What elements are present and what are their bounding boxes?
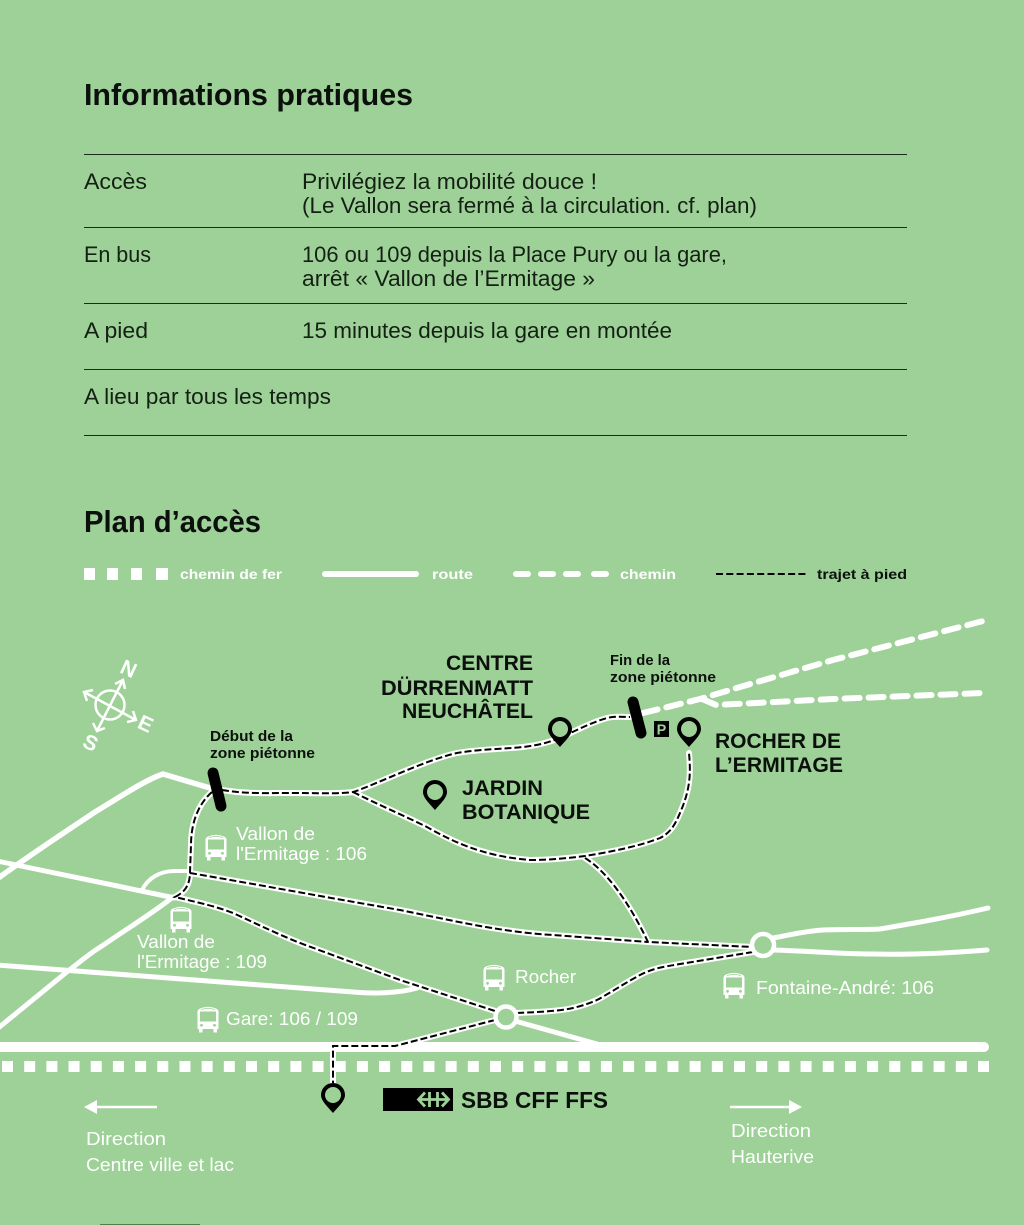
label: Centre Dürrenmatt Neuchâtel: CENTRE — [446, 652, 533, 675]
label: Vallon de l'Ermitage 109 — [137, 931, 267, 972]
label: début de la zone piétonne: zone piétonne — [210, 746, 315, 762]
legend: chemin de fer: chemin de fer — [180, 566, 283, 582]
icon: bus Fontaine-André — [724, 973, 744, 998]
label: Fontaine-André 106: Fontaine-André: 106 — [756, 977, 934, 998]
row: en bus — [84, 242, 727, 291]
icon: bus Gare — [198, 1007, 218, 1032]
table: practical information — [84, 154, 907, 436]
label: Vallon de l'Ermitage 109: l'Ermitage : 109 — [137, 951, 267, 972]
logo: SBB CFF FFS: SBB CFF FFS — [461, 1087, 608, 1113]
row: accès — [84, 169, 757, 218]
arrow: direction centre ville — [84, 1100, 157, 1114]
row: a pied: A pied — [84, 318, 148, 343]
label: Rocher de l'Ermitage: L’ERMITAGE — [715, 754, 843, 777]
label: Centre Dürrenmatt Neuchâtel: DÜRRENMATT — [381, 677, 533, 700]
label: direction Hauterive: Hauterive — [731, 1146, 814, 1167]
heading: Informations pratiques: Informations pratiques — [84, 77, 413, 112]
row: en bus: En bus — [84, 242, 151, 267]
main road — [0, 1042, 984, 1052]
label: Centre Dürrenmatt Neuchâtel: NEUCHÂTEL — [402, 699, 533, 723]
legend: chemin: chemin — [620, 566, 676, 582]
label: direction Hauterive: Direction — [731, 1120, 811, 1141]
icon: bus Vallon 106 — [206, 835, 226, 860]
legend: route: route — [432, 566, 473, 582]
icon: parking: P — [657, 722, 667, 738]
map: railway — [2, 1061, 989, 1072]
icon: compass: E — [134, 711, 157, 738]
row: accès: Accès — [84, 169, 147, 194]
label: Jardin botanique — [462, 777, 590, 824]
label: Vallon de l'Ermitage 106 — [236, 823, 367, 864]
map: walking route — [175, 717, 753, 1083]
pin: Rocher de l'Ermitage — [677, 717, 701, 747]
legend: trajet à pied: trajet à pied — [817, 566, 907, 582]
map: unpaved paths — [643, 620, 987, 713]
legend: chemin de fer — [84, 566, 283, 582]
row: a pied: 15 minutes depuis la gare en montée — [302, 318, 672, 343]
label: Centre Dürrenmatt Neuchâtel — [381, 652, 533, 723]
label: fin de la zone piétonne: Fin de la — [610, 653, 671, 669]
icon: bus Vallon 109 — [170, 907, 192, 932]
icon: bus Rocher — [484, 965, 504, 990]
label: direction Hauterive — [731, 1120, 814, 1167]
label: début de la zone piétonne: Début de la — [210, 729, 294, 745]
row: en bus: arrêt « Vallon de l’Ermitage » — [302, 266, 595, 291]
label: direction centre ville et lac: Centre ville et lac — [86, 1154, 234, 1175]
label: Jardin botanique: JARDIN — [462, 777, 543, 800]
row: accès: Privilégiez la mobilité douce ! — [302, 169, 597, 194]
label: Rocher de l'Ermitage — [715, 730, 843, 777]
label: fin de la zone piétonne — [610, 653, 716, 686]
barrier: début zone piétonne — [213, 773, 221, 806]
label: Vallon de l'Ermitage 109: Vallon de — [137, 931, 215, 952]
label: Jardin botanique: BOTANIQUE — [462, 801, 590, 824]
label: début de la zone piétonne — [210, 729, 315, 762]
label: Vallon de l'Ermitage 106: Vallon de — [236, 823, 315, 844]
label: Rocher: Rocher — [515, 966, 576, 987]
icon: compass: N — [117, 656, 140, 683]
barrier: fin zone piétonne — [633, 702, 641, 733]
pin: Centre Dürrenmatt — [548, 717, 572, 747]
icon: parking — [654, 721, 669, 738]
heading: Plan d'accès: Plan d’accès — [84, 504, 261, 539]
pin: Jardin botanique — [423, 780, 447, 810]
row: accès: (Le Vallon sera fermé à la circulation. cf. plan) — [302, 193, 757, 218]
map: roads — [0, 774, 988, 1047]
roundabout: Rocher — [496, 1006, 516, 1028]
icon: compass — [79, 656, 157, 757]
label: direction centre ville et lac — [86, 1128, 234, 1175]
icon: compass: S — [79, 730, 102, 757]
label: Rocher de l'Ermitage: ROCHER DE — [715, 730, 841, 753]
row: en bus: 106 ou 109 depuis la Place Pury ou la gare, — [302, 242, 727, 267]
logo: SBB CFF FFS — [383, 1087, 608, 1113]
row: a lieu par tous les temps: A lieu par tous les temps — [84, 384, 331, 409]
roundabout: Fontaine-André — [752, 934, 774, 956]
label: Vallon de l'Ermitage 106: l'Ermitage : 106 — [236, 843, 367, 864]
label: Gare 106/109: Gare: 106 / 109 — [226, 1008, 358, 1029]
row: a pied — [84, 318, 672, 343]
label: fin de la zone piétonne: zone piétonne — [610, 670, 716, 686]
pin: gare — [321, 1083, 345, 1113]
legend — [84, 566, 907, 582]
label: direction centre ville et lac: Direction — [86, 1128, 166, 1149]
arrow: direction Hauterive — [730, 1100, 802, 1114]
